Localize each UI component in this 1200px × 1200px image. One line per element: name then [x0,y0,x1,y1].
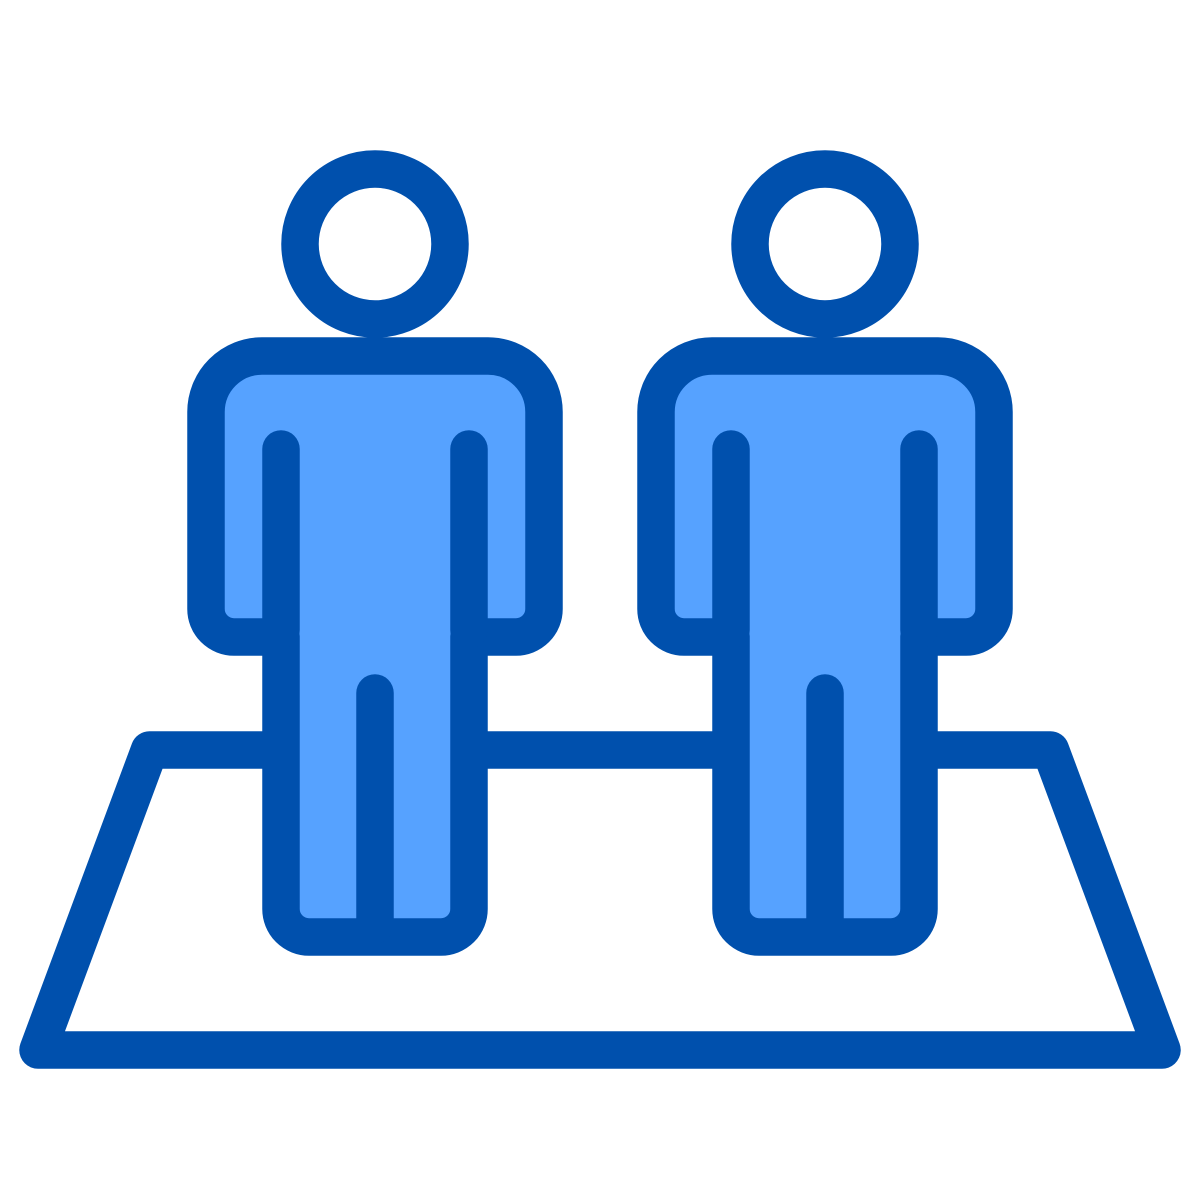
body: right [656,356,994,937]
person: left [206,169,544,937]
arm and leg lines: right [731,449,919,925]
floor mat [38,750,1162,1050]
person: right [656,169,994,937]
head: left [300,169,450,319]
body: left [206,356,544,937]
arm and leg lines: left [281,449,469,925]
head: right [750,169,900,319]
